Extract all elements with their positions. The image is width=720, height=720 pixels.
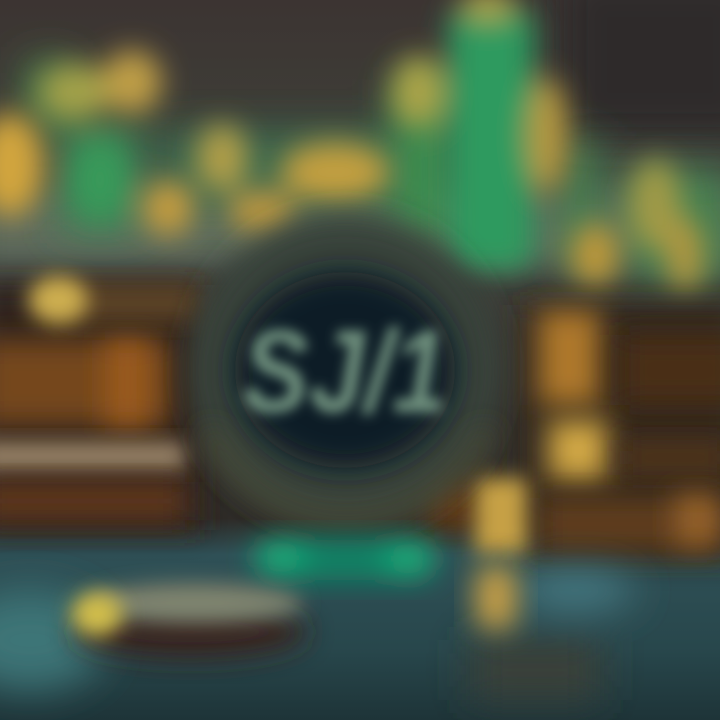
coin rim [189,214,501,526]
central coin [189,214,501,526]
left coin stacks [0,276,200,530]
rim warm lower edge [208,430,488,518]
gold reflection [475,565,517,630]
flat coin on table [71,583,308,658]
coin symbol: SJ/1 [242,306,448,438]
market chart: green and yellow bars [0,0,720,293]
green glow under coin [254,540,436,580]
dark upper right corner [560,0,720,140]
coin face [235,272,455,468]
table highlights [0,572,635,700]
right coin stacks [425,305,720,560]
